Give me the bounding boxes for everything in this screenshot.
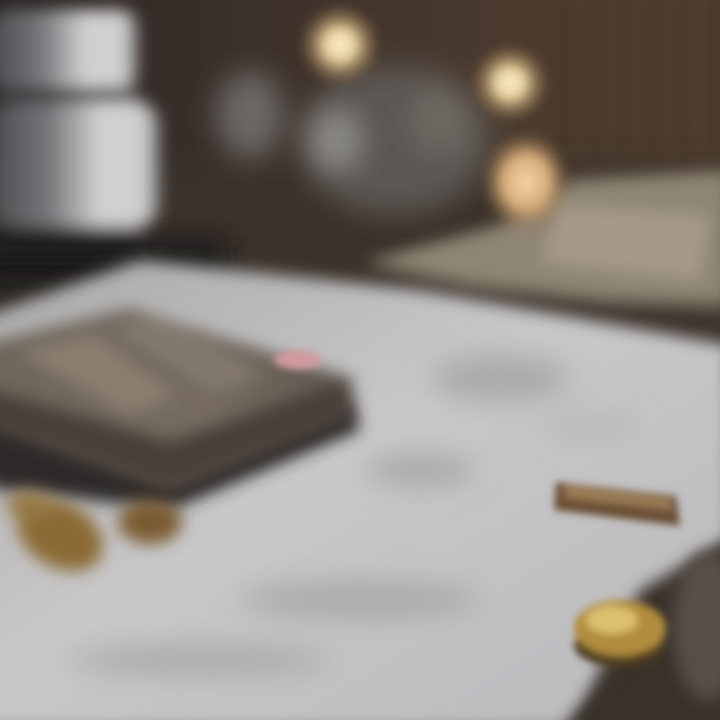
gold pieces left xyxy=(4,484,182,586)
brown bar xyxy=(554,482,680,526)
gold coin xyxy=(574,600,666,667)
pink tab on stack xyxy=(274,351,322,369)
jar xyxy=(0,10,160,258)
paper sheet xyxy=(0,260,720,720)
stack shadow xyxy=(0,400,360,510)
stack of notes xyxy=(0,308,352,492)
dark corner lower right xyxy=(560,540,720,720)
wall stripes xyxy=(560,0,717,170)
background wall xyxy=(0,0,720,200)
glass bowl xyxy=(216,65,490,215)
book at back right xyxy=(365,170,720,332)
candle lights xyxy=(298,3,572,234)
table surface xyxy=(0,165,720,315)
paper text smudges xyxy=(70,354,640,674)
